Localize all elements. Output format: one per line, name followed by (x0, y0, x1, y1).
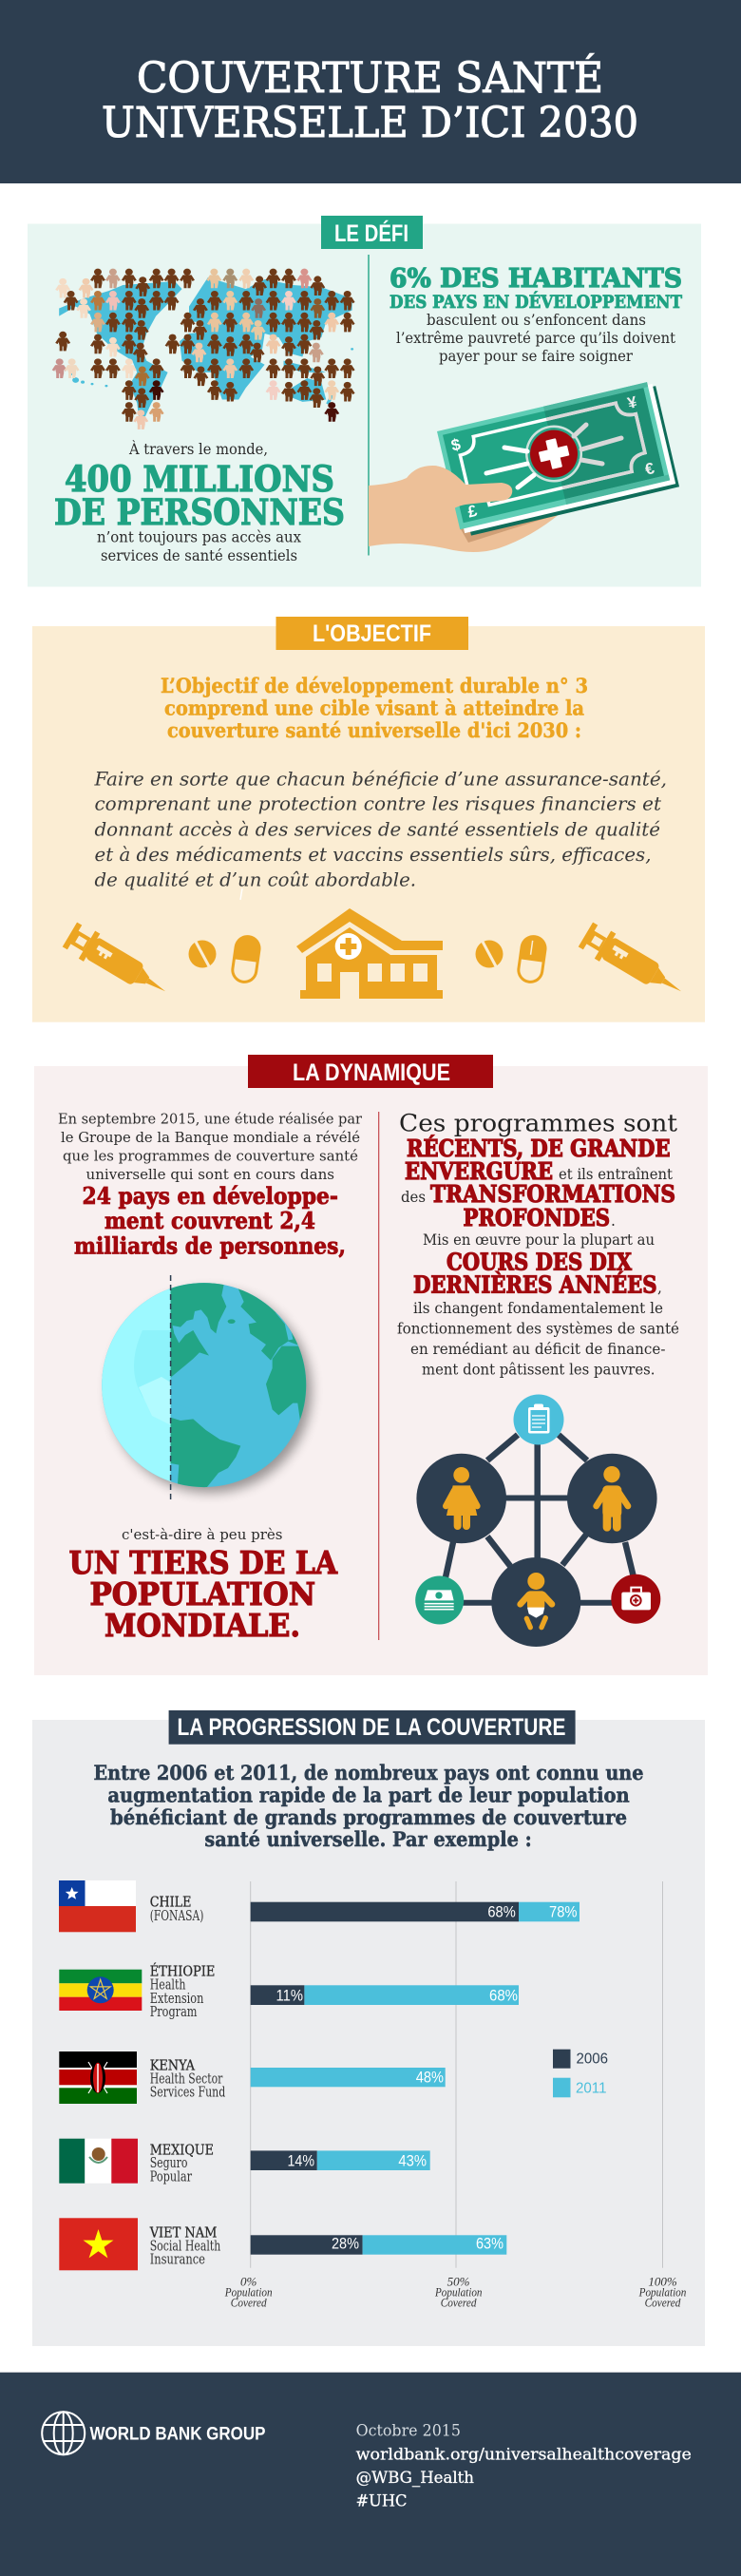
flag: kenya (59, 2051, 137, 2104)
row: kenya: KENYA (150, 2056, 195, 2073)
legend: 2006 (576, 2051, 608, 2068)
badge: le défi: LE DÉFI (334, 219, 408, 247)
bar: viet nam: 28% (332, 2235, 359, 2253)
text: target quotation (94, 768, 667, 891)
bar: viet nam (251, 2235, 506, 2255)
badge: progression: LA PROGRESSION DE LA COUVERTURE (177, 1714, 566, 1741)
text: ces programmes sont: Ces programmes sont (399, 1110, 677, 1137)
diagram: health network (415, 1395, 660, 1647)
heading: objectif de développement durable (161, 674, 588, 742)
text: cours des dix dernières années: , (657, 1280, 662, 1297)
row: chile (59, 1880, 580, 1932)
text: study intro: que les programmes de couverture santé (63, 1147, 358, 1164)
title (102, 52, 638, 147)
text: cours des dix dernières années: COURS DES DIX (446, 1249, 632, 1276)
axis labels: 0% (240, 2275, 257, 2289)
axis labels (224, 2275, 686, 2309)
text: 24 pays: ment couvrent 2,4 (104, 1207, 315, 1234)
text: basculent: payer pour se faire soigner (439, 347, 633, 365)
text: target quotation: de qualité et d’un coût abordable. (95, 868, 416, 891)
text: ils changent (397, 1300, 679, 1378)
title: COUVERTURE SANTÉ (137, 52, 603, 103)
flag: viet nam (59, 2218, 138, 2270)
text: à travers le monde: À travers le monde, (128, 439, 268, 458)
logo: world bank group: WORLD BANK GROUP (89, 2425, 266, 2445)
text: un tiers de la population mondiale: UN TIERS DE LA (69, 1544, 337, 1581)
heading: progression: Entre 2006 et 2011, de nombreux pays ont connu une (93, 1761, 644, 1784)
text: mis en oeuvre: Mis en œuvre pour la plupart au (423, 1231, 655, 1249)
row: mexique: MEXIQUE (150, 2141, 214, 2158)
row: éthiopie: Program (150, 2003, 198, 2020)
row: kenya: Health Sector (150, 2070, 223, 2088)
text: contact links: Octobre 2015 (356, 2421, 461, 2440)
bar: mexique (251, 2150, 430, 2170)
text: récents, grande envergure: et ils entraînent (559, 1166, 674, 1183)
axis labels: Population (434, 2285, 483, 2299)
text: 400 millions de personnes: 400 MILLIONS (65, 458, 334, 500)
legend: 2011 (576, 2080, 607, 2096)
icon: capsule left (230, 933, 262, 985)
icon: syringe left (62, 921, 174, 1005)
icon: round pill right (475, 941, 504, 967)
axis labels: Covered (645, 2295, 681, 2309)
icon: hand holding banknote (369, 380, 679, 552)
axis labels: Population (224, 2285, 273, 2299)
bar: kenya: 48% (416, 2069, 444, 2087)
flag: chile (59, 1880, 136, 1932)
row: chile: CHILE (150, 1894, 192, 1911)
text: study intro: le Groupe de la Banque mondiale a révélé (61, 1129, 360, 1146)
text: ils changent: ment dont pâtissent les pauvres. (422, 1361, 656, 1378)
text: target quotation: et à des médicaments et vaccins essentiels sûrs, efficaces, (95, 843, 652, 866)
heading: objectif de développement durable: comprend une cible visant à atteindre la (164, 696, 584, 720)
text: basculent: basculent ou s’enfoncent dans (427, 311, 646, 329)
icon: hand holding banknote: € (643, 459, 656, 479)
heading: progression: augmentation rapide de la part de leur population (107, 1784, 630, 1807)
text: un tiers de la population mondiale: POPULATION (89, 1575, 315, 1612)
heading: progression: santé universelle. Par exemple : (204, 1827, 532, 1851)
badge: la dynamique: LA DYNAMIQUE (293, 1059, 450, 1086)
axis labels: Population (638, 2285, 686, 2299)
bar: chile (251, 1902, 580, 1921)
badge: le défi (321, 216, 423, 249)
panel: la progression de la couverture (32, 1710, 705, 2346)
text: contact links: #UHC (356, 2492, 407, 2511)
row: mexique (59, 2139, 430, 2185)
icon: hand holding banknote: ¥ (626, 392, 639, 412)
text: 6% des habitants: DES PAYS EN DÉVELOPPEMENT (390, 291, 682, 313)
text: 400 millions de personnes (54, 458, 345, 533)
text: n'ont toujours pas accès (97, 528, 301, 564)
heading: progression (93, 1761, 644, 1851)
text: ils changent: en remédiant au déficit de finance- (410, 1341, 665, 1358)
text: target quotation: Faire en sorte que chacun bénéficie d’une assurance-santé, (94, 768, 667, 791)
badge: l'objectif (276, 617, 468, 650)
bar: éthiopie (251, 1985, 519, 2005)
text: basculent (396, 311, 676, 365)
icon: cash stack (425, 1590, 454, 1610)
row: viet nam (59, 2218, 506, 2270)
bar: éthiopie: 68% (489, 1986, 518, 2004)
bar: éthiopie: 11% (276, 1986, 303, 2004)
icon: baby (521, 1573, 552, 1628)
text: ils changent: ils changent fondamentalement le (413, 1300, 663, 1317)
text: study intro (58, 1111, 363, 1183)
text: target quotation: comprenant une protection contre les risques financiers et (95, 792, 662, 815)
icon: globe one third (95, 1273, 314, 1501)
text: n'ont toujours pas accès: n’ont toujours pas accès aux (97, 528, 301, 546)
text: un tiers de la population mondiale: MONDIALE. (104, 1607, 300, 1644)
badge: progression (169, 1710, 576, 1745)
row: éthiopie (59, 1962, 519, 2020)
text: 24 pays: 24 pays en développe- (82, 1182, 338, 1210)
panel: l'objectif (32, 617, 705, 1022)
icon: capsule right (516, 933, 548, 985)
text: récents, grande envergure: TRANSFORMATIONS (430, 1180, 675, 1208)
row: éthiopie: ÉTHIOPIE (150, 1962, 215, 1979)
icon: hand holding banknote: $ (449, 435, 463, 455)
text: contact links (356, 2421, 692, 2511)
axis labels: 50% (447, 2275, 470, 2289)
icon: hand holding banknote: £ (466, 502, 480, 522)
row: chile: (FONASA) (150, 1907, 203, 1924)
badge: la dynamique (248, 1055, 493, 1088)
text: 24 pays (74, 1182, 346, 1260)
bar: mexique: 14% (287, 2151, 314, 2169)
axis labels: Covered (231, 2295, 267, 2309)
axis labels: Covered (441, 2295, 477, 2309)
row: kenya (59, 2051, 446, 2104)
row: kenya: Services Fund (150, 2084, 226, 2101)
icon: clipboard (528, 1404, 549, 1433)
text: 6% des habitants (390, 264, 682, 313)
header band (0, 0, 741, 183)
row: mexique: Popular (150, 2167, 193, 2185)
legend (553, 2050, 608, 2097)
text: cours des dix dernières années (413, 1249, 662, 1299)
bar: mexique: 43% (398, 2151, 427, 2169)
bar: kenya (251, 2068, 446, 2087)
text: contact links: worldbank.org/universalhealthcoverage (356, 2445, 692, 2464)
text: 6% des habitants: 6% DES HABITANTS (390, 264, 682, 294)
title: UNIVERSELLE D’ICI 2030 (102, 99, 638, 147)
badge: l'objectif: L'OBJECTIF (313, 620, 431, 647)
row: viet nam: Social Health (150, 2237, 221, 2254)
text: basculent: l’extrême pauvreté parce qu’ils doivent (396, 329, 676, 347)
flag: mexique (59, 2139, 138, 2184)
text: récents, grande envergure: ENVERGURE (405, 1157, 553, 1185)
bar: viet nam: 63% (476, 2235, 504, 2253)
flag: éthiopie (59, 1970, 142, 2011)
text: ils changent: fonctionnement des systèmes de santé (397, 1321, 679, 1338)
text: 400 millions de personnes: DE PERSONNES (54, 491, 345, 533)
text: contact links: @WBG_Health (356, 2469, 474, 2488)
text: study intro: universelle qui sont en cours dans (86, 1166, 334, 1183)
axis labels: 100% (648, 2275, 677, 2289)
heading: objectif de développement durable: couverture santé universelle d'ici 2030 : (167, 718, 581, 742)
text: c'est-à-dire: c'est-à-dire à peu près (122, 1526, 283, 1543)
icon: man (597, 1466, 628, 1527)
row: viet nam: VIET NAM (149, 2223, 217, 2241)
row: éthiopie: Health (150, 1976, 186, 1994)
text: cours des dix dernières années: DERNIÈRES ANNÉES (413, 1271, 657, 1299)
heading: progression: bénéficiant de grands programmes de couverture (110, 1805, 627, 1829)
row: viet nam: Insurance (150, 2251, 205, 2268)
icon: syringe right (578, 921, 690, 1005)
text: n'ont toujours pas accès: services de santé essentiels (101, 546, 297, 564)
icon: medical kit (621, 1588, 651, 1610)
text: récents, grande envergure (401, 1135, 675, 1231)
footer (0, 2373, 741, 2576)
row: éthiopie: Extension (150, 1990, 204, 2007)
icon: round pill left (188, 941, 217, 967)
logo: world bank group (42, 2412, 266, 2454)
icon: hospital (296, 908, 443, 1000)
text: récents, grande envergure: RÉCENTS, DE GRANDE (407, 1135, 671, 1162)
icon: woman (446, 1467, 477, 1526)
heading: objectif de développement durable: L’Objectif de développement durable n° 3 (161, 674, 588, 697)
text: récents, grande envergure: . (611, 1212, 616, 1230)
bar: chile: 68% (487, 1903, 516, 1921)
text: 24 pays: milliards de personnes, (74, 1232, 346, 1260)
text: récents, grande envergure: des (401, 1189, 426, 1206)
bar: chile: 78% (549, 1903, 578, 1921)
panel: le défi (28, 216, 701, 587)
text: un tiers de la population mondiale (69, 1544, 337, 1644)
text: study intro: En septembre 2015, une étude réalisée par (58, 1111, 363, 1128)
world map of people (52, 269, 355, 429)
text: target quotation: donnant accès à des services de santé essentiels de qualité (95, 817, 660, 840)
row: mexique: Seguro (150, 2154, 188, 2171)
panel: la dynamique (34, 1055, 708, 1675)
text: récents, grande envergure: PROFONDES (464, 1204, 610, 1231)
